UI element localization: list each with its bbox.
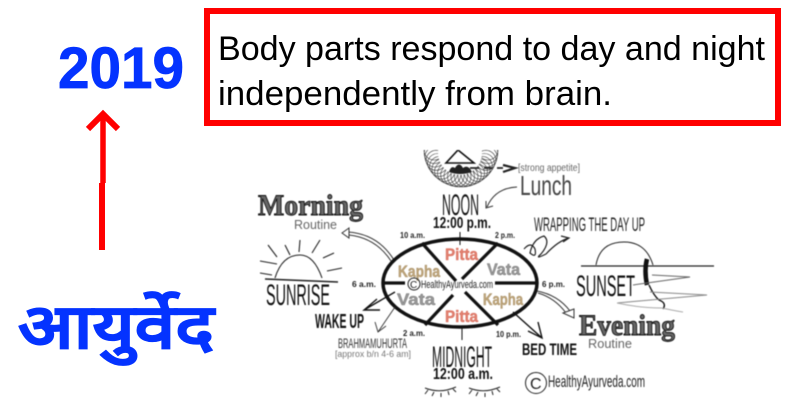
arrow: to wake up — [364, 292, 395, 310]
heading: Morning: Morning — [258, 189, 363, 222]
text: 10 a.m.: 10 a.m. — [400, 231, 425, 240]
text: bottom watermark: C — [530, 376, 542, 393]
text: Pitta bottom: Pitta — [445, 307, 478, 326]
text: 6 p.m.: 6 p.m. — [542, 280, 565, 289]
callout: red box statement — [207, 11, 778, 123]
text: wrapping the day up: WRAPPING THE DAY UP — [534, 215, 645, 236]
text: BED TIME: BED TIME — [522, 340, 577, 359]
arrow: hollow arrow to morning routine — [342, 228, 394, 261]
text: 12:00 p.m.: 12:00 p.m. — [433, 215, 491, 232]
text: Kapha left: Kapha — [398, 262, 440, 281]
arrow: dashes to appetite — [470, 165, 515, 172]
label: Ayurveda in Devanagari: आयुर्वेद — [18, 291, 216, 366]
text: Kapha right: Kapha — [483, 290, 523, 309]
text: center watermark: HealthyAyurveda.com — [421, 279, 493, 291]
arrow: spiral — [524, 236, 569, 257]
text: 2 a.m.: 2 a.m. — [403, 329, 425, 338]
panel: daily ayurvedic clock diagram: NOON — [442, 189, 479, 222]
text: bottom watermark: HealthyAyurveda.com — [548, 372, 645, 391]
text: center watermark — [408, 278, 493, 291]
text: Vata left: Vata — [397, 290, 436, 309]
panel: daily ayurvedic clock diagram — [258, 131, 714, 397]
text: Vata right: Vata — [487, 260, 521, 279]
arrow: hollow arrow to evening — [537, 291, 574, 318]
text: Lunch: Lunch — [520, 170, 572, 201]
heading: Evening: Evening — [579, 309, 675, 342]
text: WAKE UP: WAKE UP — [315, 311, 364, 333]
text: 6 a.m.: 6 a.m. — [352, 280, 376, 289]
text: Routine evening: Routine — [588, 336, 632, 351]
panel: daily ayurvedic clock diagram: SUNSET — [576, 270, 635, 303]
chart: clock ellipse — [382, 232, 538, 340]
callout: red box statement: independently from brain. — [218, 75, 612, 113]
panel: daily ayurvedic clock diagram: MIDNIGHT — [432, 341, 492, 374]
text: strong appetite: [strong appetite] — [518, 163, 580, 174]
text: BRAHMAMUHURTA: BRAHMAMUHURTA — [338, 335, 407, 351]
year label 2019: 2019 — [58, 36, 184, 101]
text: 2 p.m.: 2 p.m. — [495, 231, 515, 240]
text: Pitta top: Pitta — [445, 245, 478, 264]
text: 10 p.m.: 10 p.m. — [496, 330, 521, 339]
icon: sunset with silhouette — [581, 242, 714, 312]
arrow: red timeline arrow up — [88, 113, 118, 250]
icon: closed eyes — [425, 387, 500, 397]
arrow: lunch to noon — [486, 187, 517, 208]
arrow: to bed time — [513, 312, 542, 338]
icon: sunrise — [260, 240, 342, 282]
text: 12:00 a.m.: 12:00 a.m. — [433, 366, 493, 383]
panel: daily ayurvedic clock diagram: SUNRISE — [266, 279, 330, 312]
callout: red box statement: Body parts respond to day and night — [218, 30, 766, 68]
icon: spirograph with triangle — [423, 149, 499, 188]
arrow: to brahmamuhurta — [375, 307, 395, 332]
text: approx time: [approx b/n 4-6 am] — [335, 349, 411, 359]
text: Routine morning: Routine — [294, 217, 337, 232]
text: bottom watermark — [526, 372, 645, 394]
text: center watermark: C — [410, 280, 417, 291]
